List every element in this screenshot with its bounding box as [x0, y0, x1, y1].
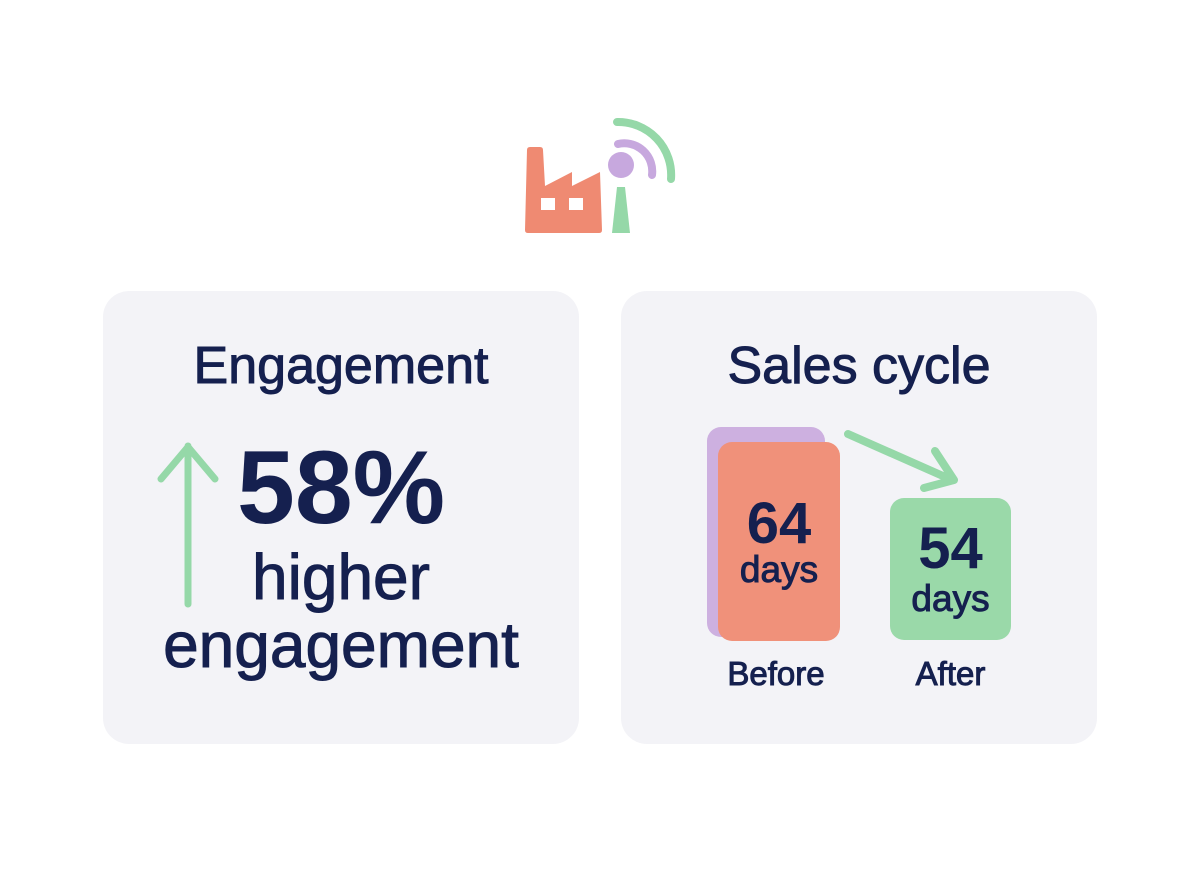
- icon: antenna: [608, 122, 671, 233]
- heading: Sales cycle: Sales cycle: [728, 337, 990, 395]
- text: higher engagement: engagement: [163, 609, 519, 681]
- chart: after bar: days: [911, 578, 990, 619]
- heading: Engagement: Engagement: [194, 337, 488, 395]
- text: higher engagement: higher: [252, 541, 430, 613]
- chart: before bar: [707, 427, 840, 641]
- arrow: before to after: [844, 430, 958, 492]
- text: higher engagement: [163, 541, 519, 681]
- icon: up arrow: [158, 442, 218, 608]
- stat: 58%: 58%: [237, 430, 445, 546]
- panel: engagement: [103, 291, 579, 744]
- panel: sales cycle: [621, 291, 1097, 744]
- label: After: After: [916, 655, 985, 692]
- icon: factory with wireless antenna: [525, 118, 676, 233]
- label: 54 days: 54: [918, 516, 983, 581]
- label: Before: Before: [727, 655, 825, 692]
- label: 64 days: 64: [747, 491, 811, 556]
- icon: factory: [525, 147, 602, 233]
- chart: before bar: days: [740, 549, 818, 590]
- chart: after bar: [890, 498, 1011, 640]
